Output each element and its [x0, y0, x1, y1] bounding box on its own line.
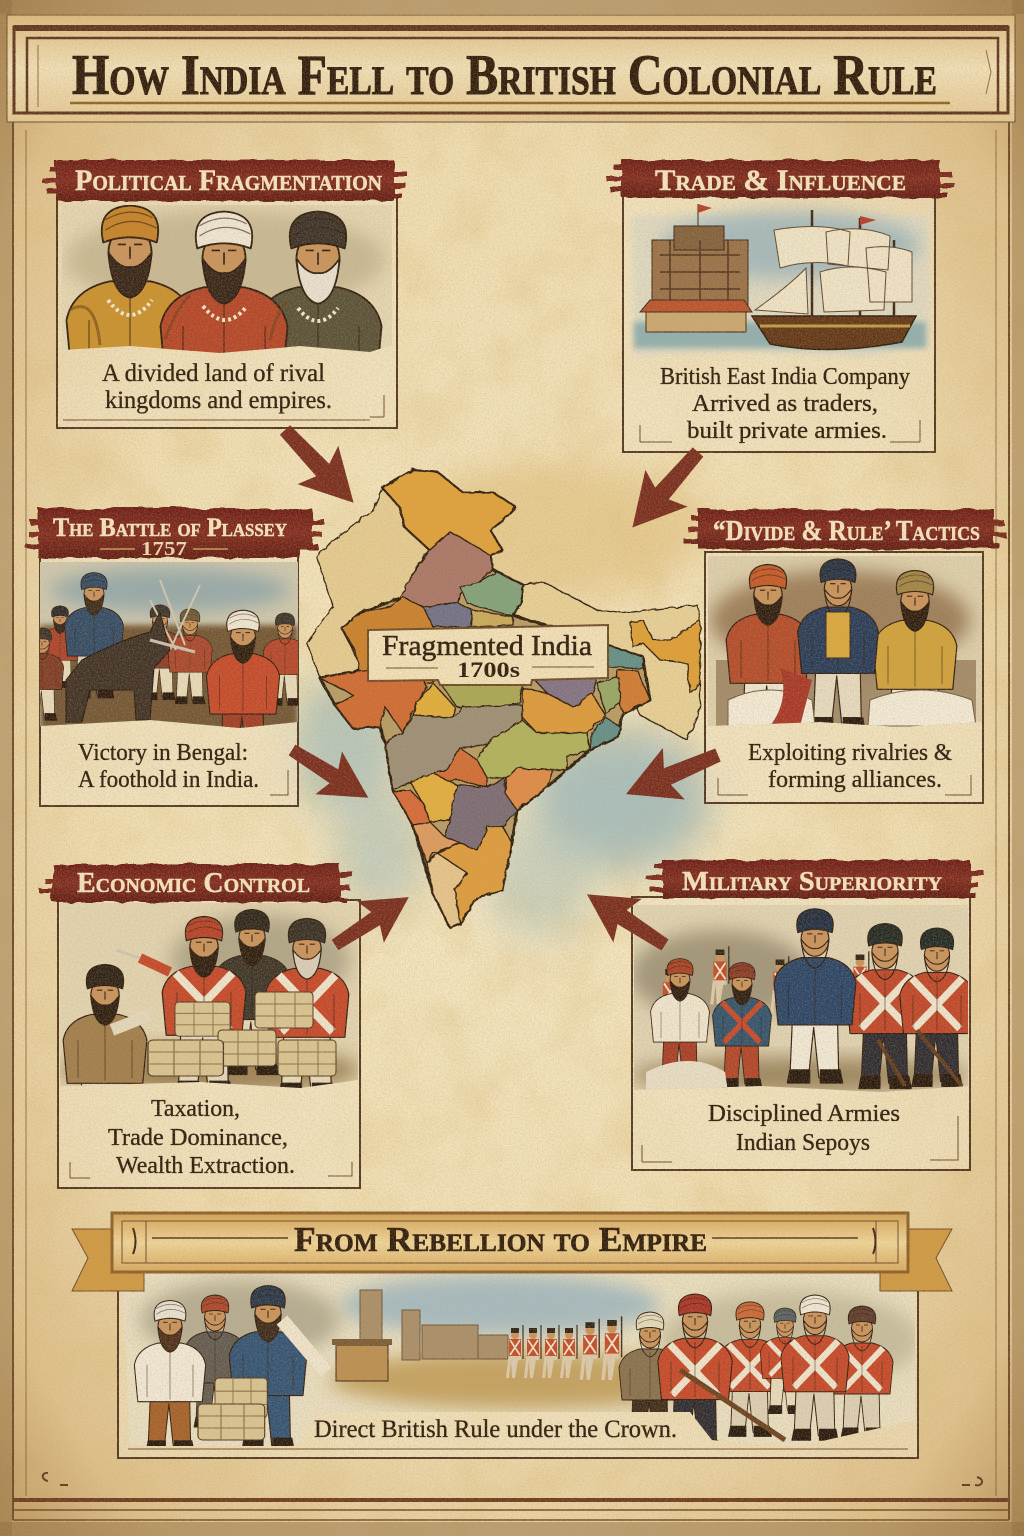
arrow: from economic control: [322, 876, 422, 966]
ribbon heading: [72, 1213, 952, 1291]
caption: Taxation,: [151, 1096, 240, 1122]
caption: built private armies.: [687, 418, 887, 444]
arrows toward map: [265, 411, 729, 967]
arrow: from trade and influence: [611, 434, 719, 546]
caption: [748, 740, 952, 793]
illustration: fort and East India ship: [632, 204, 930, 358]
panel: trade and influence: [606, 160, 955, 452]
heading banner: [40, 864, 354, 902]
caption: Wealth Extraction.: [116, 1153, 295, 1179]
ribbon heading: From Rebellion to Empire: [294, 1220, 707, 1259]
arrow: from Plassey: [279, 729, 382, 819]
caption: Victory in Bengal:: [78, 740, 248, 766]
map of fragmented India: [290, 460, 710, 940]
heading banner: [606, 160, 955, 198]
heading banner: [25, 508, 325, 560]
heading banner: The Battle of Plassey: [53, 513, 287, 542]
illustration: three rival rulers: [62, 205, 392, 353]
label: Fragmented India 1700s: 1700s: [457, 657, 521, 682]
panel: political fragmentation: [42, 158, 407, 429]
arrow: from military superiority: [573, 873, 679, 967]
heading banner: “Divide & Rule’ Tactics: [713, 516, 980, 547]
heading banner: Economic Control: [77, 868, 310, 899]
caption: A divided land of rival: [102, 360, 325, 387]
title banner: [7, 15, 1015, 122]
panel: battle of Plassey: [20, 508, 325, 806]
caption: A foothold in India.: [78, 767, 259, 793]
heading banner: Military Superiority: [682, 866, 942, 896]
label: Fragmented India 1700s: [368, 625, 608, 685]
label: Fragmented India 1700s: Fragmented India: [382, 630, 592, 662]
illustration: tax collection and bales: [60, 903, 358, 1088]
caption: Direct British Rule under the Crown.: [314, 1416, 677, 1443]
caption: British East India Company: [660, 364, 910, 390]
caption: [708, 1101, 900, 1156]
heading banner: [684, 509, 1006, 549]
heading banner: Trade & Influence: [655, 164, 906, 197]
panel: economic control: [40, 864, 360, 1188]
heading banner: [646, 860, 984, 898]
heading banner: Political Fragmentation: [75, 164, 382, 197]
illustration: negotiating figures: [708, 556, 982, 727]
caption: [78, 740, 259, 793]
caption: [660, 364, 910, 444]
caption: [108, 1096, 295, 1179]
illustration: disciplined soldiers and sepoys: [630, 905, 974, 1093]
arrow: from divide and rule: [615, 729, 729, 820]
heading banner: 1757: [141, 538, 187, 560]
caption: kingdoms and empires.: [105, 387, 332, 414]
illustration: merchants, city and marching redcoats: [122, 1272, 920, 1452]
caption: Arrived as traders,: [692, 391, 878, 417]
illustration: battle scene: [40, 562, 298, 728]
arrow: from political fragmentation: [265, 411, 374, 522]
caption: forming alliances.: [768, 767, 942, 793]
panel: military superiority: [630, 860, 984, 1170]
caption: Indian Sepoys: [736, 1130, 870, 1156]
caption: Trade Dominance,: [108, 1125, 288, 1151]
panel: divide and rule tactics: [684, 509, 1006, 803]
caption: Exploiting rivalries &: [748, 740, 952, 766]
caption: [102, 360, 332, 414]
caption: Disciplined Armies: [708, 1101, 900, 1127]
panel: from rebellion to empire: [72, 1213, 952, 1458]
